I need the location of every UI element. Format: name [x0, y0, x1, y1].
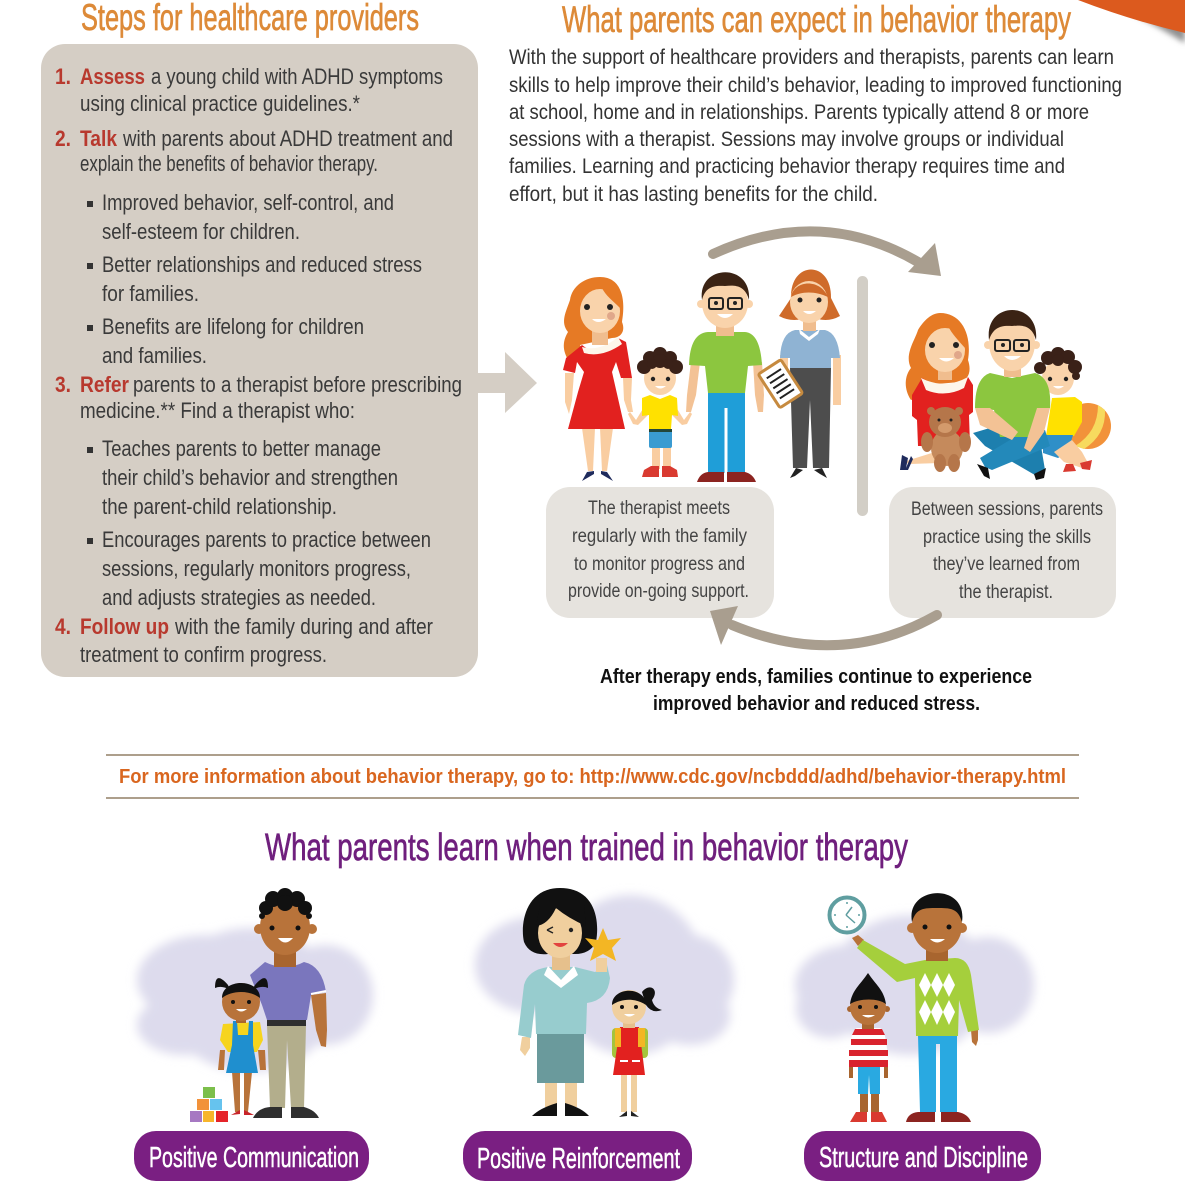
step 4: with the family during and after [174, 614, 433, 639]
corner accent [1078, 0, 1185, 43]
step 3 [55, 372, 462, 423]
step 3 bullets: their child’s behavior and strengthen [102, 465, 398, 490]
caption: between sessions: practice using the skills [923, 526, 1091, 548]
step 3 bullets: Teaches parents to better manage [102, 436, 381, 461]
more information banner: For more information about behavior therapy, go to: http://www.cdc.gov/ncbddd/adhd/behavior-therapy.html [119, 765, 1066, 788]
toy: teddy bear [921, 407, 971, 472]
figure: seated father [973, 310, 1050, 480]
curly hair [1034, 347, 1082, 380]
icon: clock [830, 898, 864, 932]
label: positive reinforcement [463, 1131, 692, 1181]
figure: girl with backpack [612, 987, 662, 1117]
step 3 bullets [87, 436, 431, 610]
star [585, 928, 621, 961]
step 2 bullets: self-esteem for children. [102, 219, 300, 244]
caption: between sessions [889, 487, 1116, 618]
step 4: Follow up [80, 614, 169, 639]
label: positive reinforcement: Positive Reinforcement [477, 1143, 680, 1175]
arrow: steps to therapy [478, 352, 537, 413]
caption: therapist meets: to monitor progress and [574, 553, 745, 575]
step 2: 2. [55, 126, 71, 151]
panel: steps list [41, 44, 478, 677]
step 2 bullets: Benefits are lifelong for children [102, 314, 364, 339]
text block: outcome [600, 665, 1032, 715]
text block: therapy introduction: effort, but it has lasting benefits for the child. [509, 183, 878, 206]
figure: mother [563, 277, 633, 481]
blocks [190, 1087, 228, 1122]
figure: boy [628, 347, 692, 477]
step 4: 4. [55, 614, 71, 639]
text block: therapy introduction: at school, home and in relationships. Parents typically attend 8 or more [509, 101, 1089, 124]
text block: therapy introduction: With the support of healthcare providers and therapists, parents can learn [509, 46, 1114, 69]
step 2 bullets: and families. [102, 343, 207, 368]
sweater pattern [919, 973, 955, 1025]
step 1 [55, 64, 443, 116]
step 2 bullets: for families. [102, 281, 199, 306]
figure: man with sweater [852, 893, 979, 1122]
curly hair [259, 888, 312, 919]
illustration: family with therapist [563, 270, 841, 482]
step 3: Refer [80, 372, 129, 397]
figure: father [686, 272, 764, 482]
arrow: cycle bottom [710, 606, 937, 645]
step 2 bullets [87, 190, 422, 368]
blob backgrounds [137, 895, 1034, 1072]
step 4 [55, 614, 433, 667]
step 3 bullets: sessions, regularly monitors progress, [102, 556, 411, 581]
step 3 bullets: Encourages parents to practice between [102, 527, 431, 552]
caption: therapist meets: provide on-going support. [568, 580, 749, 602]
figure: therapist [758, 270, 841, 478]
figure: woman [518, 888, 621, 1116]
caption: therapist meets: The therapist meets [588, 497, 730, 519]
caption: therapist meets [546, 487, 774, 618]
label: structure and discipline: Structure and Discipline [819, 1142, 1028, 1174]
caption: between sessions: they’ve learned from [933, 553, 1080, 575]
step 2: Talk [80, 126, 118, 151]
step 1: 1. [55, 64, 71, 89]
step 3: 3. [55, 372, 71, 397]
step 2 bullets: Improved behavior, self-control, and [102, 190, 394, 215]
figure: seated mother [900, 313, 973, 470]
figure: man [250, 888, 327, 1118]
caption: therapist meets: regularly with the family [572, 525, 747, 547]
illustration: father and son with clock [830, 893, 979, 1122]
figure: seated boy [1034, 347, 1092, 472]
curly hair [637, 347, 683, 374]
label: structure and discipline [804, 1131, 1041, 1181]
step 3: parents to a therapist before prescribing [133, 372, 462, 397]
toy: ball [1065, 403, 1111, 449]
illustration: mother and daughter [518, 888, 662, 1117]
illustration: family practicing at home [900, 310, 1111, 480]
clipboard [758, 360, 803, 408]
step 2: with parents about ADHD treatment and [122, 126, 453, 151]
step 1: Assess [80, 64, 145, 89]
label: positive communication [134, 1131, 369, 1181]
text block: therapy introduction: skills to help improve their child’s behavior, leading to improved functioning [509, 74, 1122, 97]
illustration: father and daughter [190, 888, 327, 1122]
step 4: treatment to confirm progress. [80, 642, 327, 667]
label: positive communication: Positive Communication [149, 1142, 359, 1174]
text block: outcome: improved behavior and reduced stress. [653, 692, 980, 715]
step 3 bullets: the parent-child relationship. [102, 494, 337, 519]
caption: between sessions: Between sessions, parents [911, 498, 1103, 520]
divider bar [857, 276, 868, 516]
text block: outcome: After therapy ends, families continue to experience [600, 665, 1032, 688]
text block: therapy introduction: sessions with a therapist. Sessions may involve groups or individual [509, 128, 1064, 151]
figure: girl [215, 978, 268, 1115]
step 1: using clinical practice guidelines.* [80, 91, 360, 116]
figure: boy with stripes [847, 973, 890, 1122]
arrow: cycle top [713, 231, 941, 276]
step 2: explain the benefits of behavior therapy. [80, 151, 378, 176]
step 1: a young child with ADHD symptoms [151, 64, 443, 89]
heading: what parents learn: What parents learn when trained in behavior therapy [265, 827, 908, 869]
step 3 bullets: and adjusts strategies as needed. [102, 585, 376, 610]
caption: between sessions: the therapist. [959, 581, 1053, 603]
step 2 [55, 126, 453, 176]
step 3: medicine.** Find a therapist who: [80, 398, 355, 423]
text block: therapy introduction [509, 46, 1122, 206]
step 2 bullets: Better relationships and reduced stress [102, 252, 422, 277]
text block: therapy introduction: families. Learning and practicing behavior therapy requires time and [509, 155, 1065, 178]
